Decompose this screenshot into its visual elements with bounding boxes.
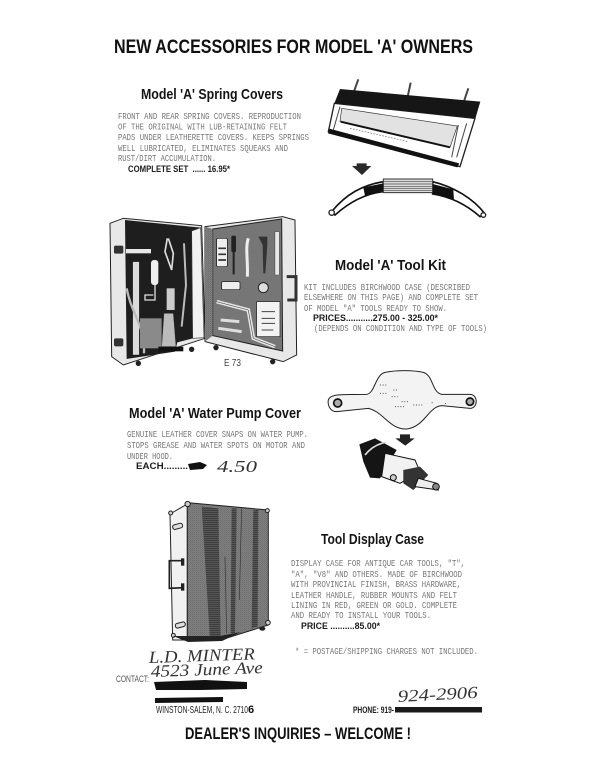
text block: tool kit description: ELSEWHERE ON THIS PAGE) AND COMPLETE SET — [304, 292, 478, 303]
text block: display case description: AND READY TO INSTALL YOUR TOOLS. — [291, 610, 431, 621]
text block: tool kit description: OF MODEL "A" TOOLS READY TO SHOW. — [304, 303, 447, 314]
label: E 73: E 73 — [224, 358, 241, 369]
price: water pump: EACH......... — [136, 461, 188, 472]
text block: tool kit description: (DEPENDS ON CONDITION AND TYPE OF TOOLS) — [314, 323, 487, 334]
contact block — [116, 644, 264, 716]
phone label: PHONE: 919- — [353, 705, 394, 716]
price: display case: PRICE ..........85.00* — [301, 621, 380, 632]
heading: spring covers: Model 'A' Spring Covers — [141, 86, 283, 103]
handwritten phone: 924-2906 — [397, 683, 479, 706]
text block: spring covers description: RUST/DIRT ACCUMULATION. — [118, 153, 216, 164]
text block: water pump description: GENUINE LEATHER COVER SNAPS ON WATER PUMP. — [127, 429, 308, 440]
text block: tool kit description: KIT INCLUDES BIRCHWOOD CASE (DESCRIBED — [304, 282, 470, 293]
price: tool kit: PRICES...........275.00 - 325.00* — [313, 313, 438, 324]
handle — [287, 277, 296, 300]
illustration: spring cover and leaf spring — [328, 79, 486, 217]
heading: tool display case: Tool Display Case — [321, 531, 424, 548]
text block: spring covers description — [118, 111, 309, 164]
text block: water pump description: STOPS GREASE AND WATER SPOTS ON MOTOR AND — [127, 440, 305, 451]
footnote: * = POSTAGE/SHIPPING CHARGES NOT INCLUDED. — [295, 646, 478, 657]
redaction mark — [395, 707, 482, 712]
closing line: DEALER'S INQUIRIES – WELCOME ! — [185, 725, 411, 743]
arrow: down to water pump — [395, 434, 415, 446]
panel: tool kit text — [304, 257, 487, 334]
water pump — [359, 438, 439, 490]
panel: spring covers text — [118, 86, 309, 175]
contact label: CONTACT: — [116, 674, 149, 685]
text block: display case description: LINING IN RED, GREEN OR GOLD. COMPLETE — [291, 600, 457, 611]
text block: tool kit description — [304, 282, 487, 334]
title: NEW ACCESSORIES FOR MODEL 'A' OWNERS — [114, 36, 473, 58]
redaction marks — [154, 680, 247, 703]
illustration: display case — [169, 501, 270, 640]
left panel tools — [114, 238, 186, 355]
illustration: tool kit case — [110, 217, 297, 366]
heading: water pump cover: Model 'A' Water Pump Cover — [129, 405, 301, 422]
illustration: water pump cover — [328, 371, 476, 490]
text block: display case description: DISPLAY CASE FOR ANTIQUE CAR TOOLS, "T", — [291, 558, 465, 569]
handwritten name: L.D. MINTER — [147, 644, 256, 667]
handwritten address: 4523 June Ave — [150, 658, 264, 681]
text block: spring covers description: FRONT AND REAR SPRING COVERS. REPRODUCTION — [118, 111, 301, 122]
handwritten zip digit: 6 — [248, 704, 254, 716]
redaction blob — [188, 462, 207, 470]
text block: spring covers description: WELL LUBRICATED, ELIMINATES SQUEAKS AND — [118, 143, 288, 154]
price: spring covers: COMPLETE SET ...... 16.95* — [128, 164, 230, 175]
arrow: down to spring — [352, 163, 371, 175]
panel: display case text — [291, 531, 465, 632]
text block: display case description: LEATHER HANDLE, RUBBER MOUNTS AND FELT — [291, 590, 457, 601]
text block: spring covers description: OF THE ORIGINAL WITH LUB-RETAINING FELT — [118, 122, 287, 132]
city line: WINSTON-SALEM, N. C. 2710 — [156, 705, 248, 716]
text block: display case description — [291, 558, 465, 621]
panel: water pump text — [127, 405, 308, 476]
text block: spring covers description: PADS UNDER LEATHERETTE COVERS. KEEPS SPRINGS — [118, 132, 309, 143]
phone block — [353, 683, 482, 716]
text block: display case description: "A", "V8" AND OTHERS. MADE OF BIRCHWOOD — [291, 569, 462, 580]
right panel tools — [217, 232, 280, 347]
text block: display case description: WITH PROVINCIAL FINISH, BRASS HARDWARE, — [291, 579, 461, 590]
illustration: display case lower edge — [173, 632, 241, 642]
text block: water pump description — [127, 429, 308, 462]
heading: tool kit: Model 'A' Tool Kit — [335, 257, 446, 274]
handwritten price: 4.50 — [217, 457, 258, 476]
text block: water pump description: UNDER HOOD. — [127, 451, 173, 462]
